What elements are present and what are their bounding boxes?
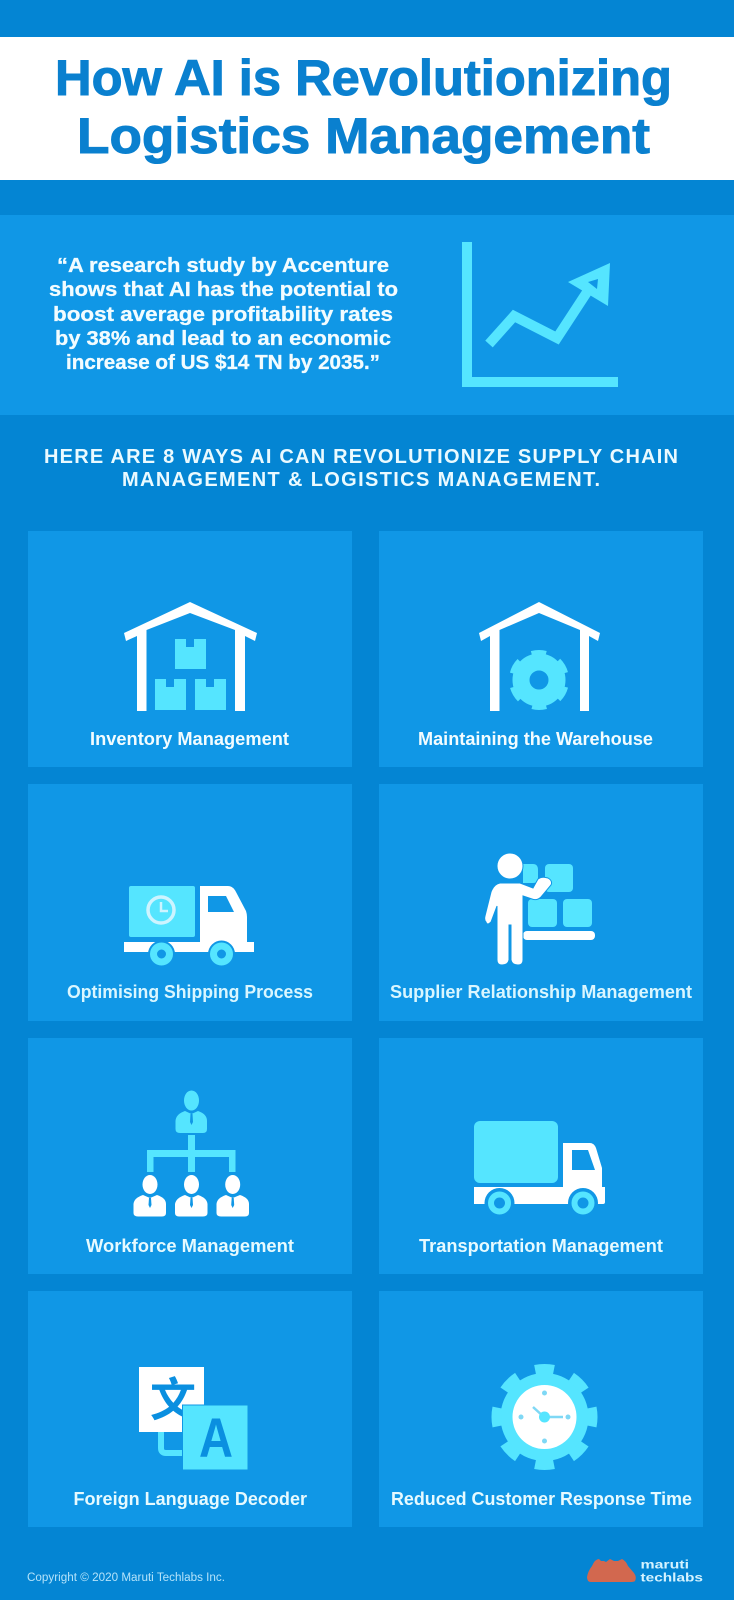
icon: organisation chart: [134, 1090, 249, 1216]
label: Optimising Shipping Process: [67, 982, 313, 1002]
panel: quote: [0, 215, 734, 415]
icon: clock gear: [488, 1361, 601, 1473]
quote text: boost average profitability rates: [53, 304, 393, 326]
icon: growth chart: [462, 242, 618, 387]
label: Maintaining the Warehouse: [418, 729, 653, 749]
icon: translation cards: A: [199, 1406, 233, 1469]
panel: optimising shipping process: [28, 784, 352, 1021]
panel: transportation management: [379, 1038, 703, 1274]
title: Logistics Management: [77, 108, 650, 164]
copyright: Copyright © 2020 Maruti Techlabs Inc.: [27, 1572, 225, 1584]
quote text: by 38% and lead to an economic: [55, 328, 391, 350]
label: Inventory Management: [90, 729, 289, 749]
quote text: [49, 255, 398, 374]
label: Transportation Management: [419, 1236, 663, 1256]
title band: [0, 37, 734, 180]
section heading: MANAGEMENT & LOGISTICS MANAGEMENT.: [122, 469, 600, 491]
panel: inventory management: [28, 531, 352, 767]
label: Workforce Management: [86, 1236, 294, 1256]
label: Supplier Relationship Management: [390, 982, 692, 1002]
section heading: [44, 446, 678, 491]
logo: [587, 1558, 703, 1584]
logo wordmark: [640, 1558, 703, 1584]
title: [55, 50, 672, 164]
panel: supplier relationship management: [379, 784, 703, 1021]
panel: maintaining the warehouse: [379, 531, 703, 767]
icon: warehouse with boxes: [124, 602, 257, 711]
section heading: HERE ARE 8 WAYS AI CAN REVOLUTIONIZE SUPPLY CHAIN: [44, 446, 678, 468]
icon: delivery truck with clock: [124, 886, 254, 968]
icon: logo cloud: [587, 1559, 636, 1582]
icon: translation cards: 文: [150, 1374, 196, 1426]
logo wordmark: techlabs: [640, 1570, 703, 1584]
quote text: “A research study by Accenture: [57, 255, 389, 277]
panel: workforce management: [28, 1038, 352, 1274]
quote text: increase of US $14 TN by 2035.”: [66, 352, 380, 374]
icon: lorry: [474, 1121, 605, 1218]
panel: foreign language decoder: [28, 1291, 352, 1527]
label: Reduced Customer Response Time: [391, 1489, 692, 1509]
title: How AI is Revolutionizing: [55, 50, 672, 106]
panel: reduced customer response time: [379, 1291, 703, 1527]
label: Foreign Language Decoder: [74, 1489, 307, 1509]
logo wordmark: maruti: [640, 1558, 689, 1572]
icon: translation cards: [139, 1367, 248, 1470]
icon: worker with boxes: [485, 853, 595, 965]
icon: warehouse with gear: [479, 602, 600, 713]
quote text: shows that AI has the potential to: [49, 279, 398, 301]
